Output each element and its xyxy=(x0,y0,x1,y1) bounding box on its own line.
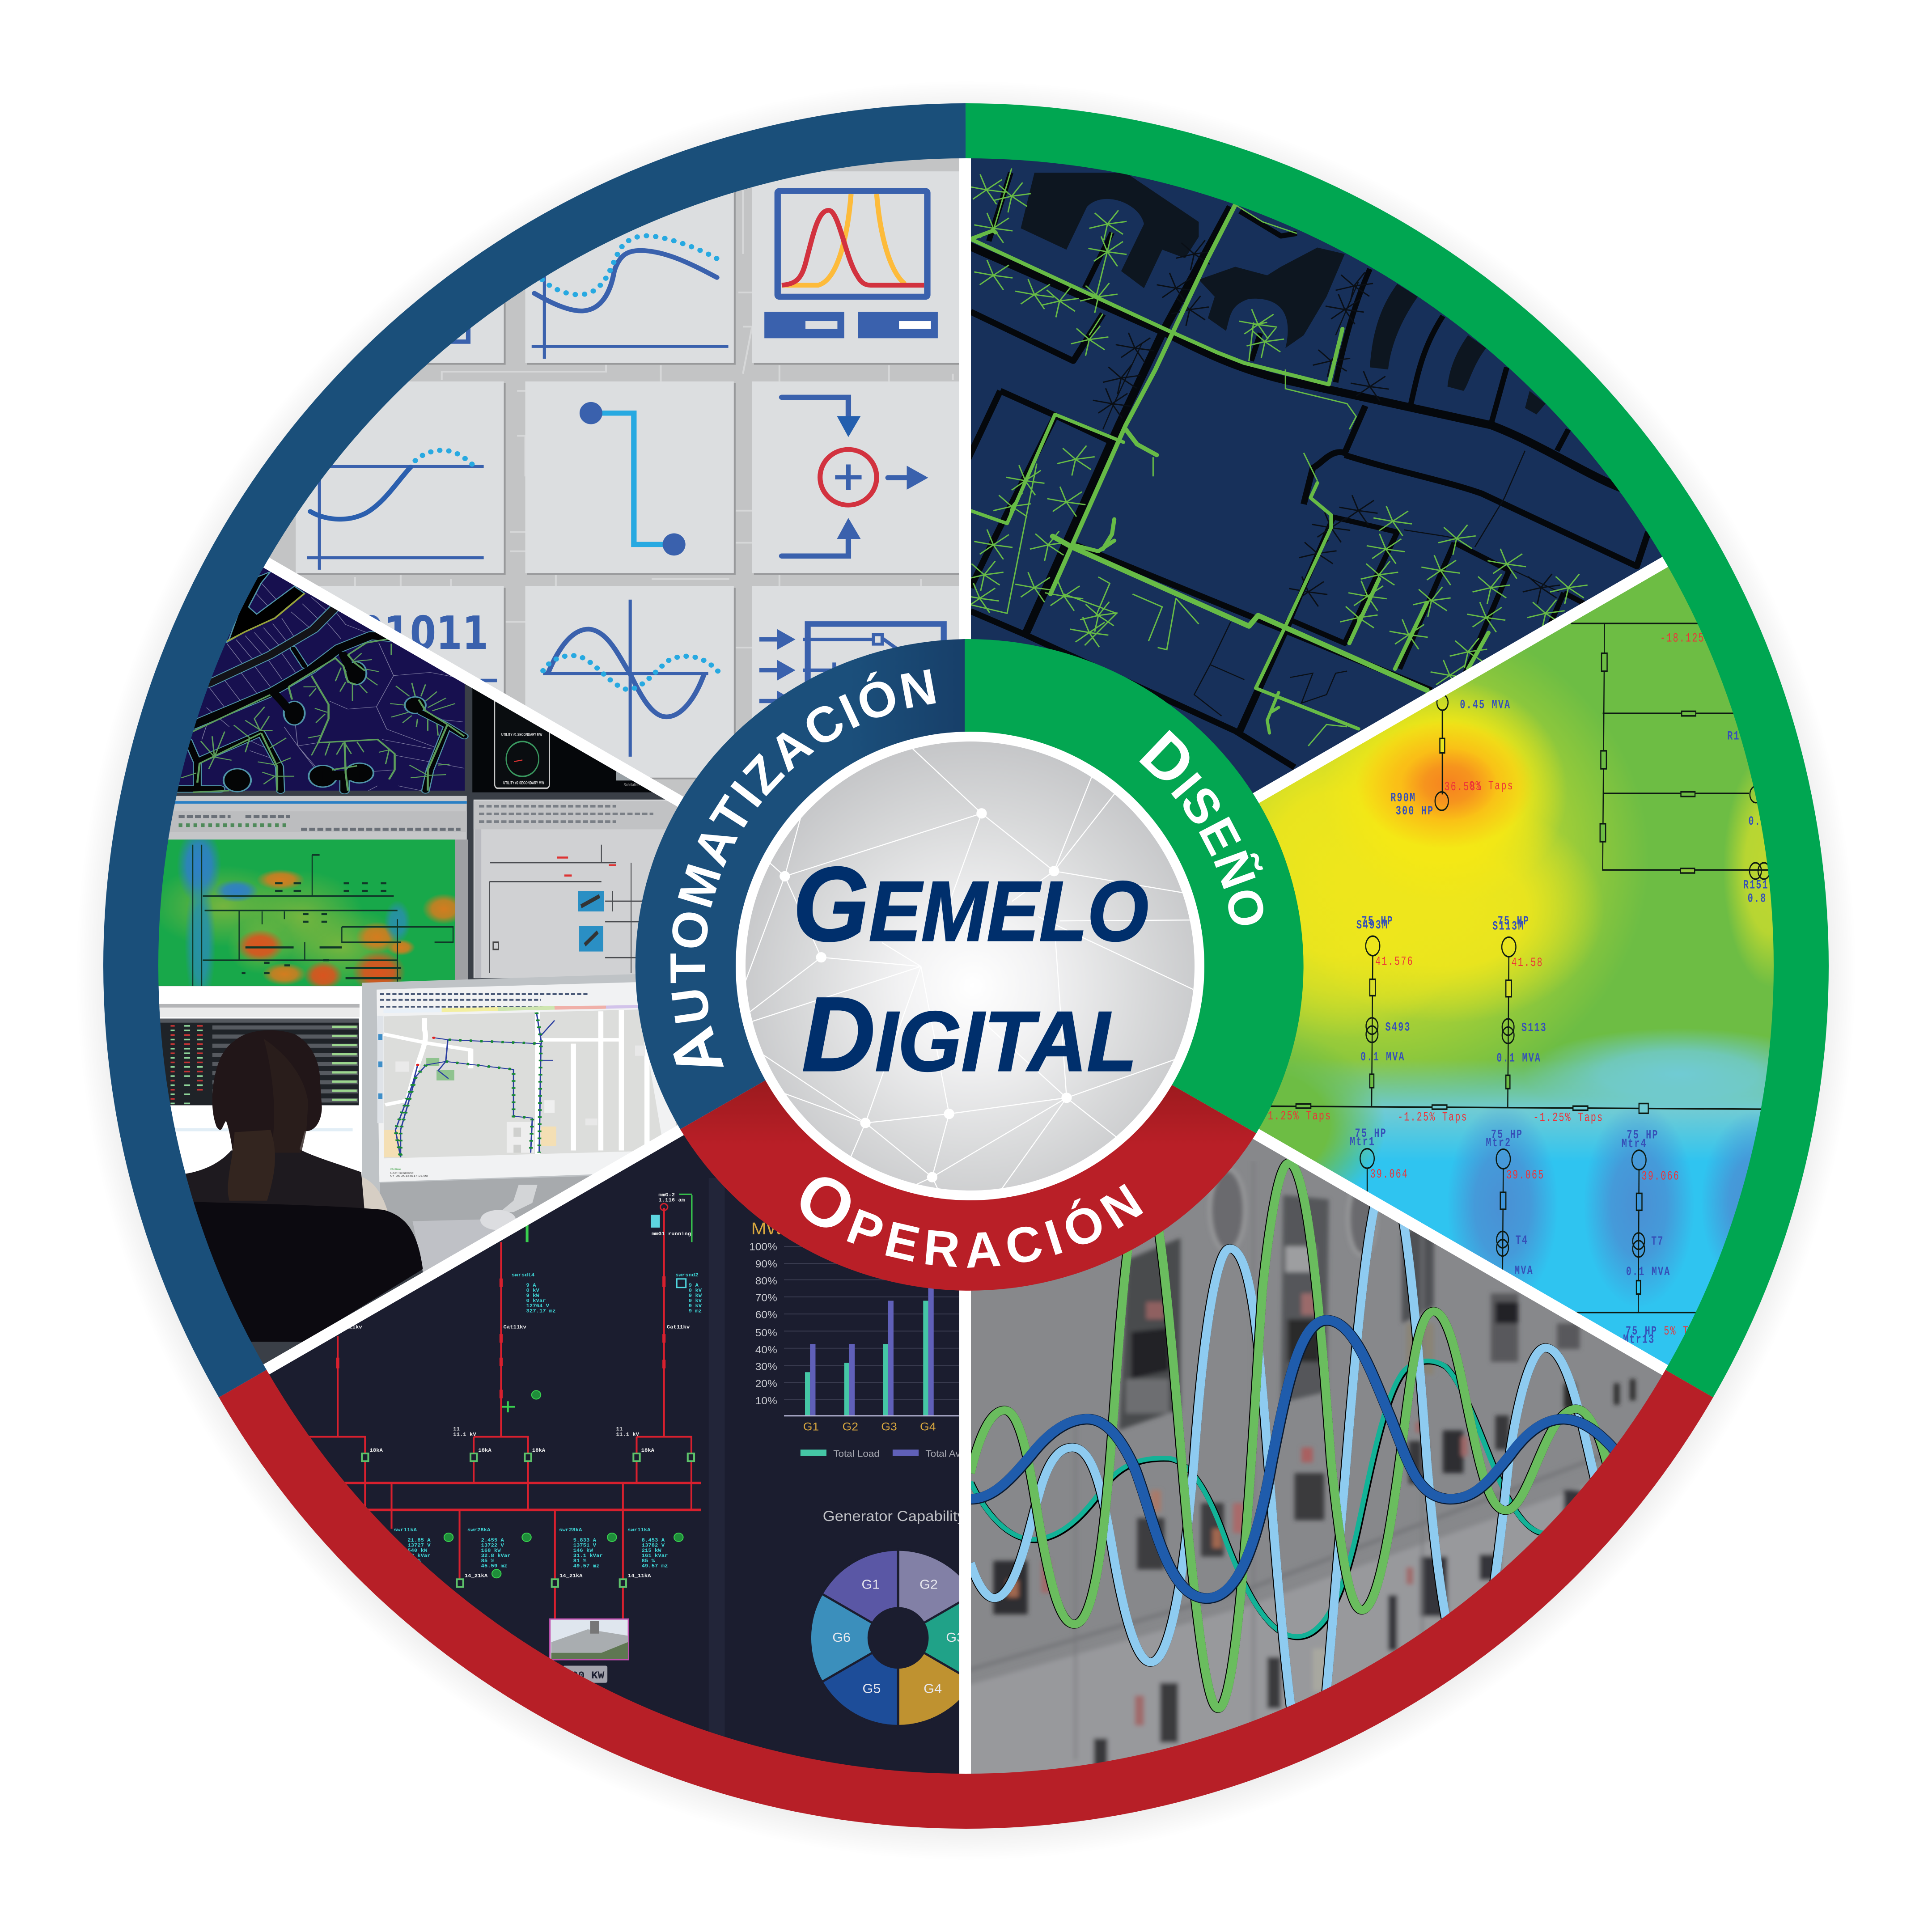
small readouts: swr28kA xyxy=(467,1527,491,1533)
bar chart: G4 xyxy=(920,1421,936,1433)
icon: spectrum monitor xyxy=(764,191,938,338)
panel: operations dashboard: 18kA xyxy=(370,1447,383,1453)
small readouts: 215 kW xyxy=(642,1547,662,1554)
bar chart: 40% xyxy=(755,1345,777,1356)
bar chart: 50% xyxy=(755,1328,777,1339)
icon: summing junction xyxy=(782,397,928,556)
red labels: 39.065 xyxy=(1506,1169,1545,1182)
small readouts: 13727 V xyxy=(407,1542,431,1548)
red labels xyxy=(1268,632,1705,1339)
monitor: GIS network: 04-06-2018@14:21:00 xyxy=(390,1174,428,1178)
panel: operations dashboard: 18kA xyxy=(641,1447,655,1453)
small readouts: swr11kA xyxy=(394,1527,417,1533)
panel: operations dashboard: mmG-2 xyxy=(658,1192,675,1198)
icon: step connector xyxy=(580,402,686,555)
small readouts: 49.57 mz xyxy=(573,1563,599,1569)
small readouts: 13751 V xyxy=(573,1542,597,1548)
donut chart: G4 xyxy=(924,1682,942,1696)
small readouts: 9 kV xyxy=(689,1303,702,1309)
monitor: GIS network: Online xyxy=(390,1168,401,1170)
bar chart: 60% xyxy=(755,1309,777,1321)
bar chart: MW xyxy=(751,1219,784,1238)
panel: operations dashboard xyxy=(264,1118,994,1789)
segment: green xyxy=(965,639,1304,1133)
red labels: 41.58 xyxy=(1512,956,1543,970)
feeder lines xyxy=(970,205,1488,733)
inner label ring xyxy=(636,639,1304,1291)
red labels: -1.25% Taps xyxy=(1398,1111,1468,1125)
small readouts: 8.453 A xyxy=(642,1537,665,1543)
roads xyxy=(966,173,1682,767)
blue labels: Mtr13 xyxy=(1623,1333,1655,1347)
ring: green diseño xyxy=(966,131,1801,1384)
icon: binary xyxy=(358,606,497,682)
blue labels: S113 xyxy=(1521,1021,1547,1035)
red labels: 5% T xyxy=(1664,1325,1689,1339)
blue labels: Mtr1 xyxy=(1350,1135,1375,1149)
card shadows xyxy=(250,173,962,780)
panel: operations dashboard: 11 xyxy=(453,1426,460,1432)
donut chart: G1 xyxy=(862,1577,880,1592)
blue labels: 75 HP xyxy=(1498,915,1530,928)
small readouts: swr11kA xyxy=(627,1527,651,1533)
bar chart: G3 xyxy=(881,1421,897,1433)
blue labels: 300 HP xyxy=(1396,805,1434,818)
donut chart: G2 xyxy=(919,1577,938,1592)
blue labels: 0.1 MVA xyxy=(1626,1265,1671,1279)
blue labels xyxy=(1350,699,1769,1347)
small readouts: 146 kW xyxy=(573,1547,593,1554)
center globe xyxy=(736,732,1204,1200)
small readouts: 85 % xyxy=(481,1558,495,1564)
small readouts: 9 A xyxy=(689,1282,699,1288)
blue labels: Mtr4 xyxy=(1622,1137,1647,1151)
small readouts: 45.59 mz xyxy=(481,1563,507,1569)
panel: operations dashboard: 14_21kA xyxy=(465,1573,488,1579)
small readouts: 32.8 kVar xyxy=(481,1553,511,1559)
monitor: purple feeder map xyxy=(147,551,465,792)
small readouts: 9 kW xyxy=(526,1292,540,1299)
title: Digital: DIGITAL xyxy=(802,975,1137,1093)
blue labels: 0.45 MVA xyxy=(1460,699,1511,712)
bar chart: 100% xyxy=(749,1241,777,1253)
panel: grid network map xyxy=(961,134,1691,805)
blue labels: 0.8 xyxy=(1748,892,1767,906)
small readouts: 9 mz xyxy=(689,1308,702,1314)
kW readout: 200 KW xyxy=(565,1670,605,1682)
red labels: 39.066 xyxy=(1642,1170,1680,1184)
donut chart: G6 xyxy=(832,1631,851,1645)
bar chart: Total Load xyxy=(833,1448,880,1459)
panel: operations dashboard: Cat11kv xyxy=(667,1324,690,1330)
bar chart: 10% xyxy=(755,1396,777,1407)
small readouts: 12764 V xyxy=(526,1303,550,1309)
small readouts: 9 kW xyxy=(689,1292,702,1299)
panel: control room photo xyxy=(97,485,765,1410)
radial dividers xyxy=(262,152,1668,1780)
panel: operations dashboard: 1.116 am xyxy=(658,1197,685,1203)
panel: load flow heatmap xyxy=(1100,530,1883,1470)
blue labels: 0. xyxy=(1748,815,1761,829)
donut chart: G5 xyxy=(863,1682,881,1696)
waveform: blue xyxy=(970,1320,1617,1598)
panel: switchgear with waveforms xyxy=(962,1118,1691,1803)
blue labels: Mtr2 xyxy=(1486,1136,1511,1150)
thin black lines xyxy=(1103,282,1559,716)
blue labels: S493M xyxy=(1356,919,1388,932)
waveform: green xyxy=(970,1163,1610,1708)
red labels: 41.576 xyxy=(1375,955,1414,969)
small readouts: 13722 V xyxy=(481,1542,504,1548)
plant thumbnail xyxy=(550,1619,628,1660)
panel: operations dashboard: 14_11kA xyxy=(628,1573,651,1579)
red labels: 1.25% Taps xyxy=(1268,1110,1331,1123)
panel: operations dashboard: 11.1 kV xyxy=(616,1432,640,1438)
small readouts: 2.455 A xyxy=(481,1537,504,1543)
panel: operations dashboard: 11 xyxy=(616,1426,623,1432)
ring: blue automatización xyxy=(131,131,966,1384)
panel: operations dashboard: 14_21kA xyxy=(559,1573,583,1579)
blue labels: S113M xyxy=(1492,920,1525,934)
small readouts: 31.1 kVar xyxy=(573,1553,603,1559)
network lines xyxy=(746,748,1193,1192)
blue labels: 75 HP xyxy=(1491,1128,1523,1142)
blue labels: 0.1 MVA xyxy=(1360,1051,1405,1064)
blue labels: T4 xyxy=(1516,1234,1528,1248)
label: Diseño: DISEÑO xyxy=(1127,717,1276,933)
small readouts: 168 kW xyxy=(481,1547,501,1554)
blue labels: 75 HP xyxy=(1362,915,1394,928)
bar chart: G2 xyxy=(843,1421,858,1433)
heat blobs xyxy=(1100,607,1883,1470)
blue labels: R151 xyxy=(1743,879,1769,893)
blue labels: R90M xyxy=(1390,792,1416,805)
panel: operations dashboard: Cat11kv xyxy=(339,1324,362,1330)
waveform: light blue xyxy=(970,1174,1596,1803)
small readouts: 161 kVar xyxy=(642,1553,668,1559)
small readouts xyxy=(394,1272,702,1569)
parcels xyxy=(202,583,464,791)
thin green laterals xyxy=(970,169,1432,746)
small readouts: 0 kVar xyxy=(526,1298,546,1304)
small readouts: swrsdt4 xyxy=(512,1272,534,1278)
bar chart: 30% xyxy=(755,1361,777,1373)
monitor: GIS network xyxy=(362,972,688,1235)
dark parking blocks xyxy=(1021,173,1546,415)
panel: operations dashboard: 18kA xyxy=(478,1447,492,1453)
donut chart xyxy=(810,1508,986,1726)
small readouts: 9 A xyxy=(526,1282,536,1288)
title: Gemelo: GEMELO xyxy=(793,845,1148,963)
donut chart: Generator Capability xyxy=(823,1508,965,1525)
monitor: alarm list xyxy=(127,986,370,1237)
blue labels: 75 HP xyxy=(1626,1325,1657,1339)
monitor stand and desk xyxy=(380,1176,681,1280)
small readouts: swrsnd2 xyxy=(675,1272,699,1278)
bar chart: 90% xyxy=(755,1259,777,1270)
kW readout xyxy=(563,1665,607,1683)
switchgear photo xyxy=(962,1161,1682,1789)
icon: binary: 01011 xyxy=(358,606,488,660)
icon: logic block xyxy=(759,624,944,711)
icon: sine wave xyxy=(543,600,718,757)
small readouts: 327.17 mz xyxy=(526,1308,556,1314)
monitor: gauges: UTILITY #2 SECONDARY MW xyxy=(503,780,544,785)
blue labels: MVA xyxy=(1514,1264,1534,1278)
ring: red operación xyxy=(243,1384,1689,1801)
icon: response curve xyxy=(532,236,729,359)
icon: saturation curve xyxy=(307,450,484,570)
segment: red xyxy=(680,966,1256,1291)
one-line diagram xyxy=(1252,623,1771,1313)
outer ring xyxy=(131,131,1801,1801)
waveform: teal xyxy=(970,1361,1544,1637)
donut chart: G3 xyxy=(946,1631,964,1645)
small readouts: 21.85 A xyxy=(407,1537,431,1543)
small readouts: 540 kW xyxy=(407,1547,428,1554)
label: Automatización: AUTOMATIZACIÓN xyxy=(654,658,943,1086)
blue labels: S493 xyxy=(1385,1021,1411,1035)
blue labels: 75 HP xyxy=(1627,1129,1659,1143)
blue labels: 0.1 MVA xyxy=(1496,1052,1541,1066)
monitor: gauges: UTILITY #1 SECONDARY MW xyxy=(501,732,542,737)
red labels: -18.125 xyxy=(1660,632,1705,645)
bar chart: 80% xyxy=(755,1276,777,1287)
small readouts: 0 kV xyxy=(526,1288,540,1293)
small readouts: 0 kV xyxy=(689,1288,702,1293)
small readouts: 0 kV xyxy=(689,1298,702,1304)
panel: operations dashboard: mmG1 running xyxy=(652,1231,691,1237)
roads xyxy=(177,609,464,791)
small readouts: swr28kA xyxy=(559,1527,582,1533)
label: Operación: OPERACIÓN xyxy=(783,1155,1158,1279)
small readouts: 85 % xyxy=(407,1558,421,1564)
panel: automation function block cards xyxy=(269,158,959,797)
monitor: GIS network: Last Scanned: xyxy=(390,1172,414,1174)
monitor: gauges: Substation xyxy=(624,782,640,787)
red labels: 0% Taps xyxy=(1469,780,1514,793)
blue labels: R1 xyxy=(1727,730,1740,744)
small readouts: 81 % xyxy=(573,1558,587,1564)
feeders xyxy=(193,639,464,792)
bar chart: Total Available xyxy=(925,1448,989,1459)
bar chart: 20% xyxy=(755,1378,777,1390)
bar chart xyxy=(749,1219,989,1459)
person at monitors xyxy=(185,1030,423,1342)
panel: operations dashboard: Cat11kv xyxy=(504,1324,526,1330)
monitor: schematic window xyxy=(474,800,715,978)
small readouts: 85 % xyxy=(642,1558,655,1564)
red labels: 39.064 xyxy=(1370,1168,1408,1182)
red labels: 36.581 xyxy=(1445,780,1483,794)
bar chart: G1 xyxy=(803,1421,819,1433)
monitor: gauges xyxy=(472,670,717,792)
icon: partial block xyxy=(451,328,470,344)
panel: operations dashboard: 11.1 kV xyxy=(453,1432,477,1438)
blue labels: 75 HP xyxy=(1355,1127,1387,1141)
small readouts: 13782 V xyxy=(642,1542,665,1548)
monitor: heat map window xyxy=(134,796,468,1009)
small readouts: 5.833 A xyxy=(573,1537,597,1543)
panel: operations dashboard: 18kA xyxy=(532,1447,546,1453)
bar chart: 70% xyxy=(755,1292,777,1304)
small readouts: 49.57 mz xyxy=(642,1563,668,1569)
red labels: -1.25% Taps xyxy=(1534,1111,1603,1125)
blue labels: T7 xyxy=(1651,1235,1664,1249)
segment: blue xyxy=(636,639,965,1129)
one-line diagram xyxy=(309,1208,701,1618)
small readouts: 18 kVar xyxy=(407,1553,431,1559)
